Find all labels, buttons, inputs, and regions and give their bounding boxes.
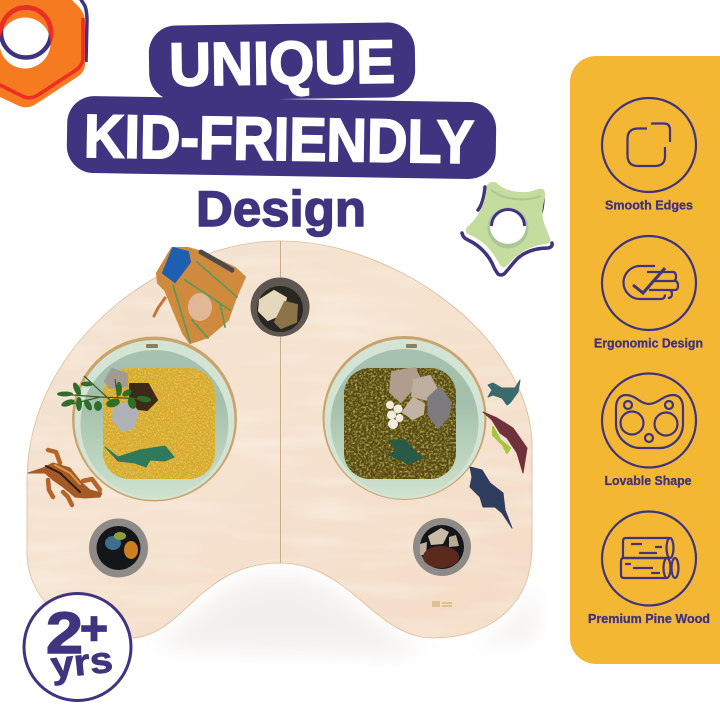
feature: premium pine wood: Premium Pine Wood [588,612,710,626]
feature: ergonomic design: Ergonomic Design [594,336,703,350]
feature: smooth edges: Smooth Edges [605,198,693,212]
toy red dinosaur [483,412,527,473]
toy lizard [28,450,102,505]
bottom left cup [89,518,148,578]
age badge: yrs [49,639,115,686]
sidebar panel: features [570,56,720,664]
dark green dinosaur [388,440,423,464]
table shadow [150,560,537,655]
age badge: 2 [46,601,83,666]
top cup [250,278,310,336]
decorative orange nut [0,0,87,107]
rocks and eggs [386,368,451,429]
toy blue dinosaur [470,467,512,528]
title: unique pill: UNIQUE [169,27,396,99]
title: design: Design [196,181,366,237]
bottom right cup [413,518,471,576]
toy teal dinosaur [488,380,520,405]
left bowl with yellow sand [57,336,237,502]
toy volcano [154,248,245,343]
right bowl with mung beans [322,336,486,500]
decorative green star [462,182,552,275]
feature: ergonomic design [594,236,703,350]
feature: lovable shape: Lovable Shape [604,474,692,488]
age badge: + [80,602,108,654]
feature: premium pine wood [588,512,710,626]
feature: lovable shape [602,374,696,488]
feature: smooth edges [602,98,696,212]
green dinosaur [105,446,174,467]
dirt, rocks and plant [57,369,157,431]
title: kid-friendly pill: KID-FRIENDLY [83,102,474,176]
wooden table [20,235,540,645]
age badge [24,594,131,700]
